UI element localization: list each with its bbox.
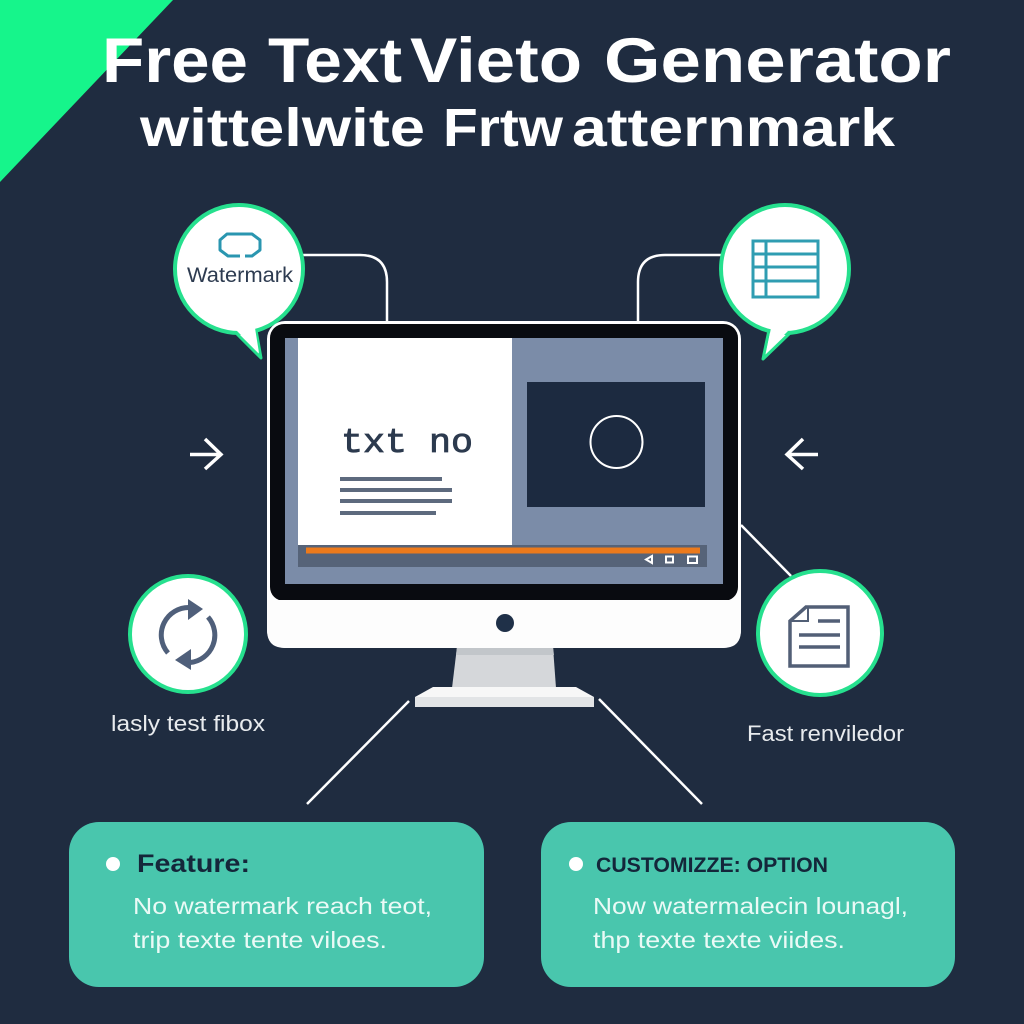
connector lines top xyxy=(300,255,725,322)
arrow: right pointing xyxy=(190,439,221,469)
panel: customize option: thp texte texte viides. xyxy=(593,927,845,953)
panel: feature: trip texte tente viloes. xyxy=(133,927,387,953)
arrow: left pointing xyxy=(787,439,818,469)
screen text: txt no xyxy=(341,425,473,463)
text lines xyxy=(340,479,452,513)
panel: feature: No watermark reach teot, xyxy=(133,893,432,919)
monitor xyxy=(267,321,741,707)
title xyxy=(102,26,951,158)
bubble: watermark: Watermark xyxy=(187,264,294,287)
title: Frtw xyxy=(443,98,564,158)
icon: refresh xyxy=(130,576,246,692)
title: Text xyxy=(268,26,402,96)
player bar xyxy=(298,545,707,567)
title: Free xyxy=(102,26,248,96)
bubble: table icon xyxy=(721,205,849,359)
title: Vieto xyxy=(410,26,582,96)
monitor body xyxy=(267,321,741,648)
bubble: watermark xyxy=(175,205,303,358)
monitor stand xyxy=(452,647,556,688)
panel: customize option: CUSTOMIZZE: OPTION xyxy=(596,854,828,877)
panel: feature xyxy=(69,822,484,987)
screen xyxy=(285,338,723,584)
panel: customize option: Now watermalecin lounagl, xyxy=(593,893,908,919)
panel: feature: Feature: xyxy=(137,850,250,878)
label: document: Fast renviledor xyxy=(747,721,904,746)
video pane xyxy=(527,382,705,507)
icon: document xyxy=(758,571,882,695)
title: atternmark xyxy=(572,98,896,158)
connector lines xyxy=(307,525,791,804)
panel: customize option xyxy=(541,822,955,987)
label: refresh: lasly test fibox xyxy=(111,711,265,736)
green corner triangle xyxy=(0,0,173,182)
title: Generator xyxy=(604,26,951,96)
white document pane xyxy=(298,338,512,546)
title: wittelwite xyxy=(139,98,425,158)
